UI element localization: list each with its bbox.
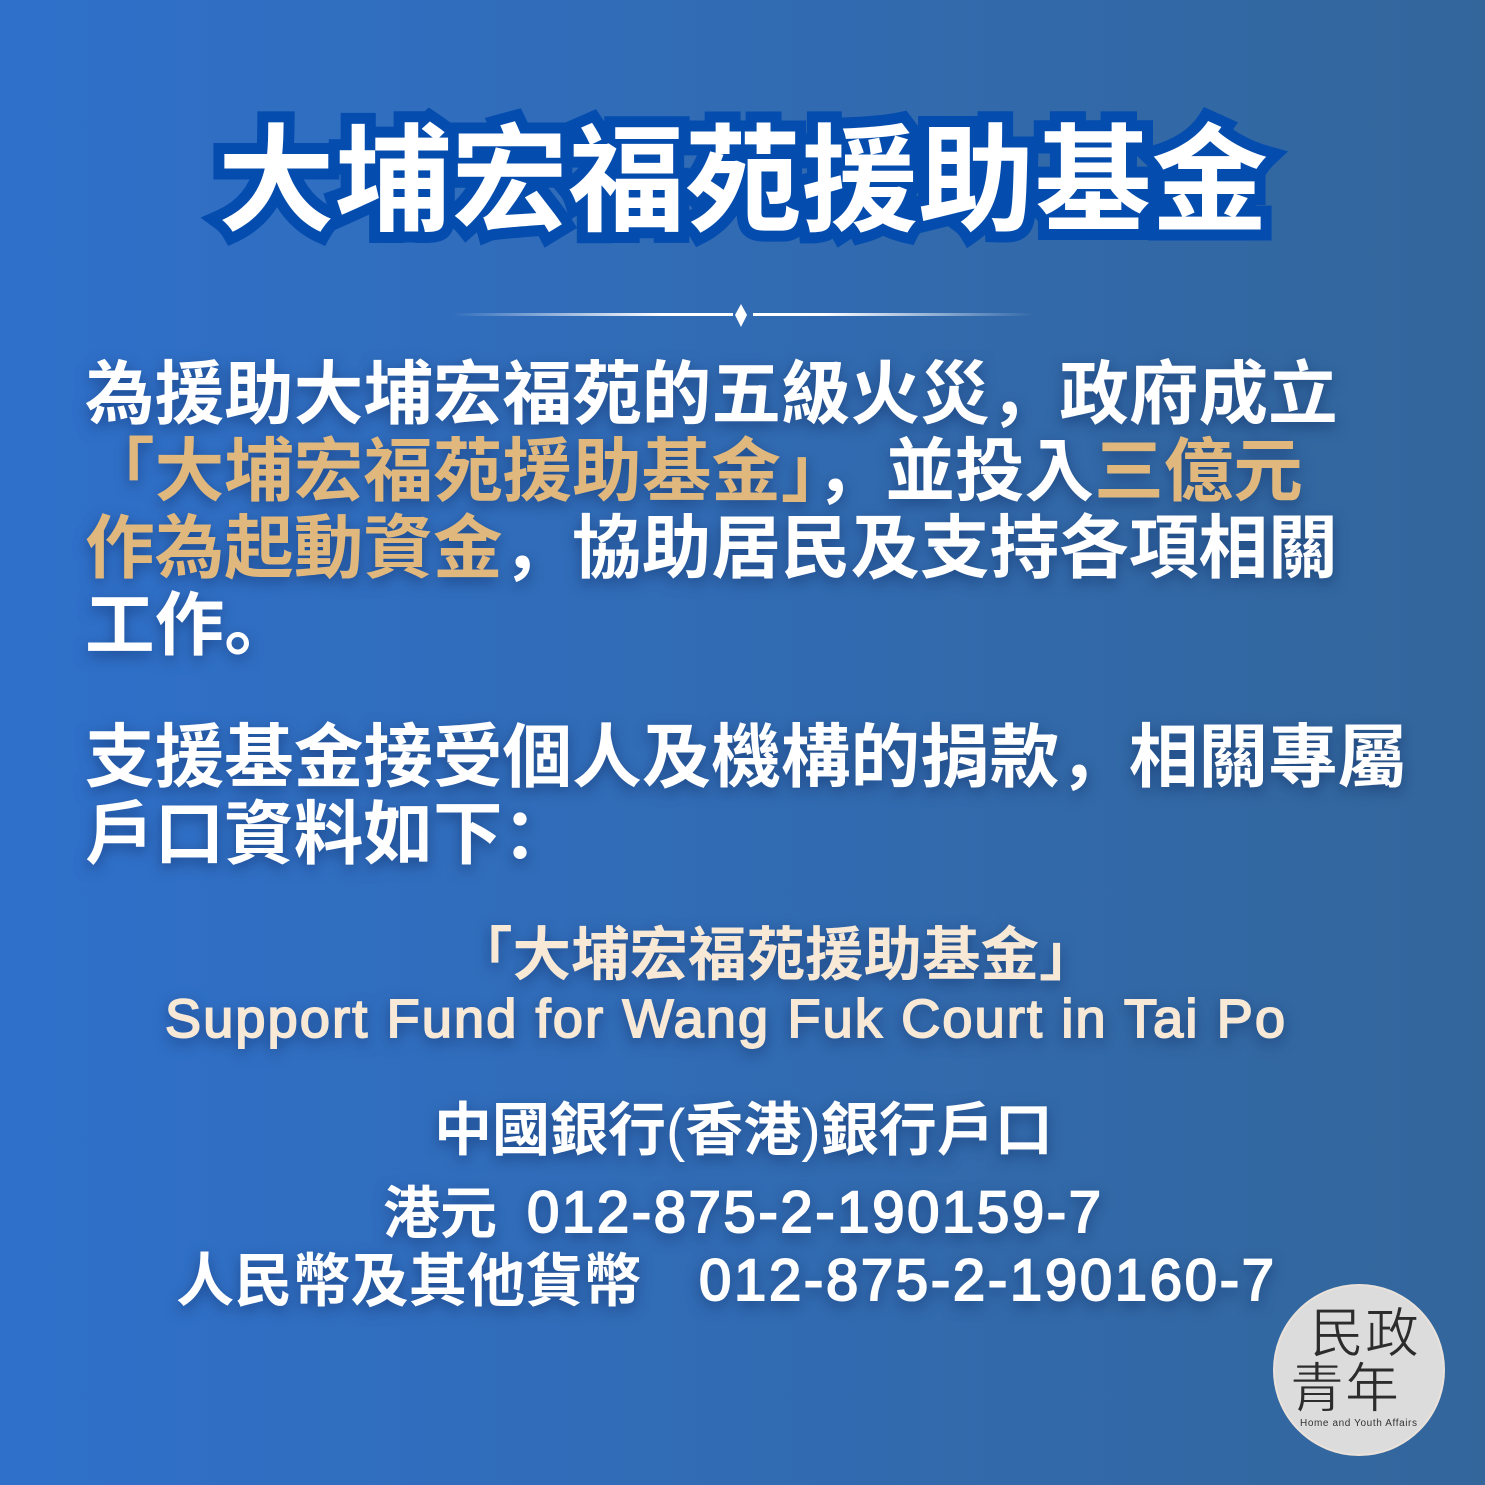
logo: 年	[1345, 1359, 1399, 1419]
paragraph: fund announcement: 工作。	[85, 586, 294, 664]
paragraph: donation intro	[85, 718, 1407, 873]
fund name	[165, 923, 1285, 1049]
paragraph: fund announcement: 為援助大埔宏福苑的五級火災，政府成立	[85, 355, 1338, 433]
paragraph: fund announcement	[85, 355, 1338, 664]
title: 大埔宏福苑援助基金	[218, 116, 1268, 246]
paragraph: donation intro: 戶口資料如下：	[85, 795, 572, 873]
logo	[1274, 1285, 1444, 1455]
account numbers: 012-875-2-190159-7	[527, 1180, 1101, 1245]
logo: Home and Youth Affairs	[1300, 1418, 1417, 1429]
logo: 政	[1365, 1304, 1419, 1364]
paragraph: fund announcement: 作為起動資金，協助居民及支持各項相關	[85, 509, 1338, 587]
divider	[452, 304, 1034, 327]
bank account heading: 中國銀行(香港)銀行戶口	[434, 1098, 1053, 1163]
logo: 民	[1310, 1304, 1364, 1364]
paragraph: fund announcement: 「大埔宏福苑援助基金」，並投入三億元	[85, 432, 1303, 510]
fund name: 「大埔宏福苑援助基金」	[454, 923, 1098, 988]
account numbers: 港元	[383, 1182, 497, 1246]
paragraph: donation intro: 支援基金接受個人及機構的捐款，相關專屬	[85, 718, 1407, 796]
logo: 青	[1290, 1359, 1344, 1419]
fund name: Support Fund for Wang Fuk Court in Tai Po	[165, 989, 1285, 1049]
account numbers: 012-875-2-190160-7	[699, 1248, 1274, 1313]
account numbers	[176, 1180, 1274, 1314]
account numbers: 人民幣及其他貨幣	[176, 1249, 642, 1314]
title: 大埔宏福苑援助基金	[218, 116, 1268, 246]
